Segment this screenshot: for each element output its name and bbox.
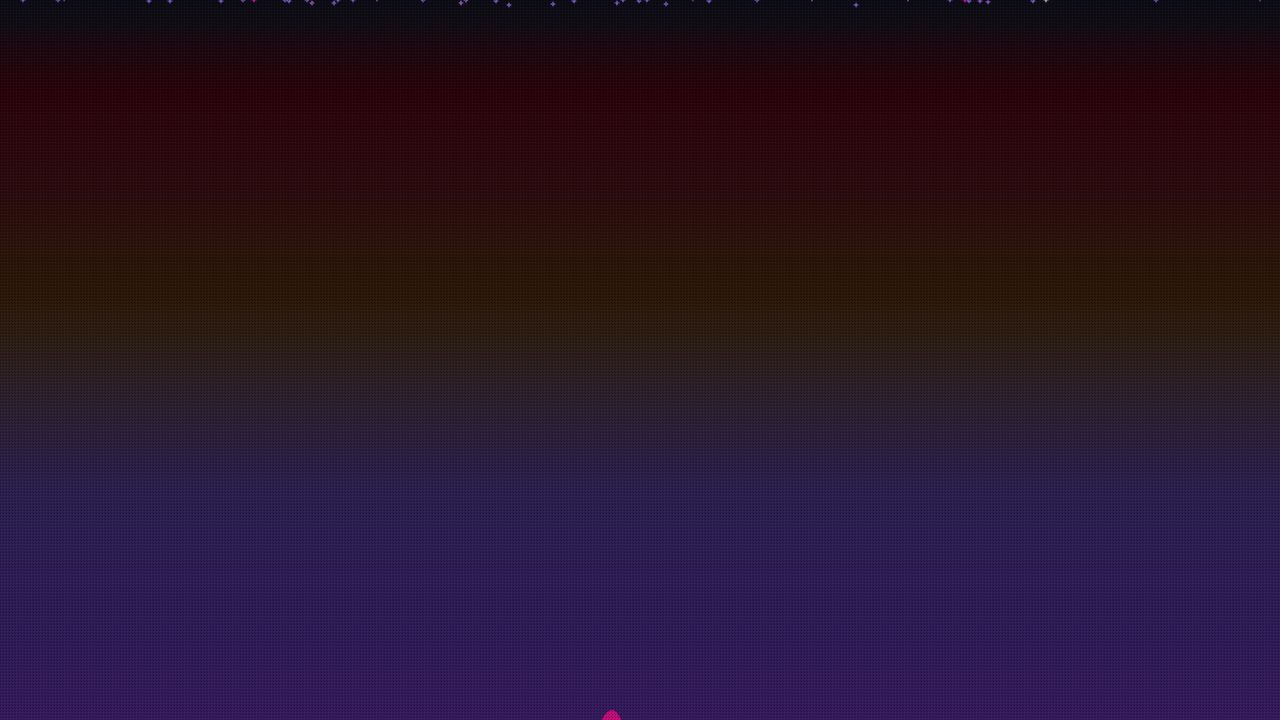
rising pink shape [601, 710, 622, 720]
star field [20, 0, 1263, 8]
